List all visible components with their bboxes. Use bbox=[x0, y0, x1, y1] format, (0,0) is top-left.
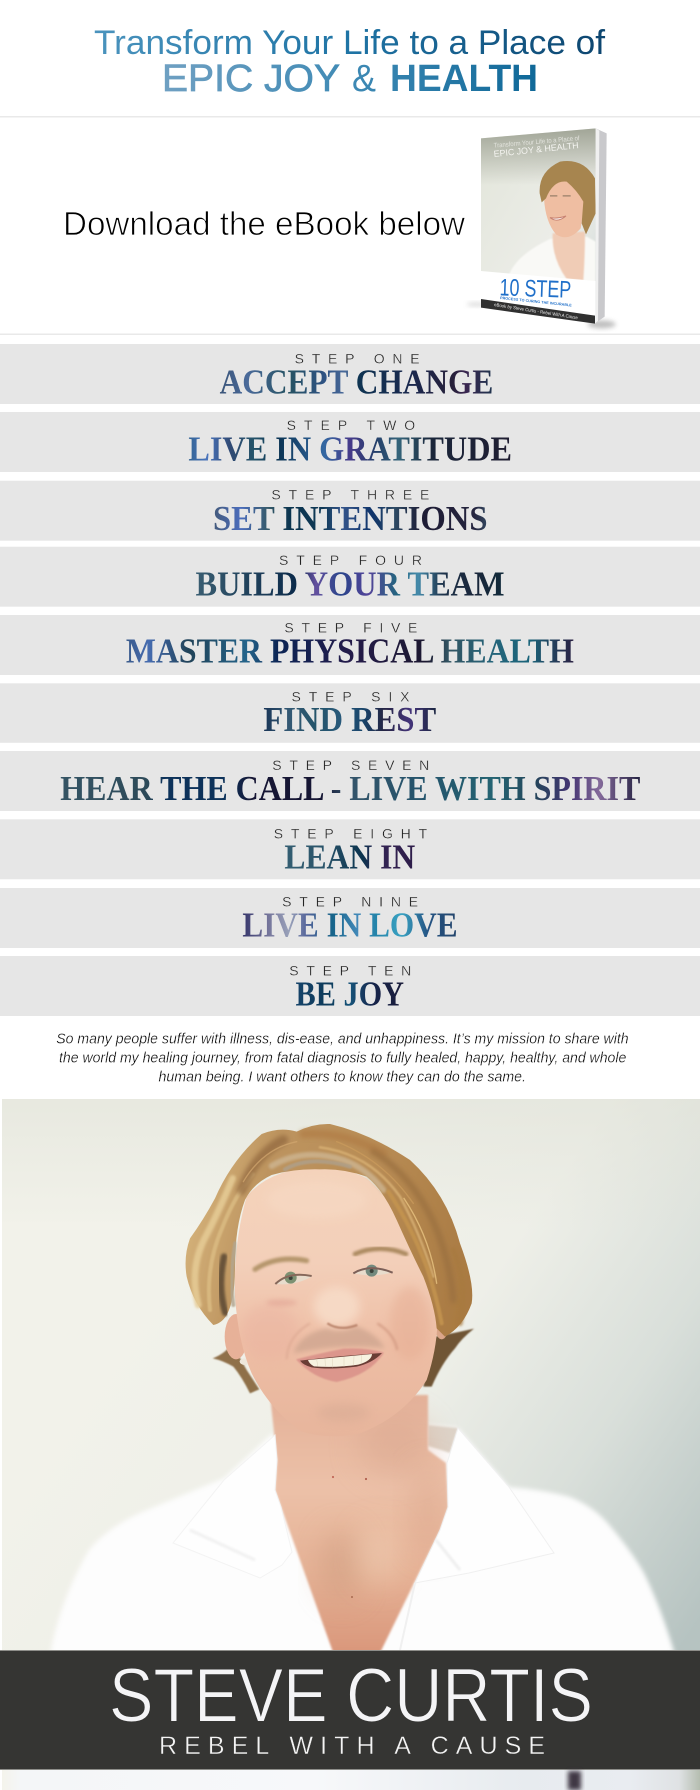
step seven: STEP SEVEN bbox=[272, 757, 429, 773]
mouth bbox=[296, 1348, 384, 1382]
step two: STEP TWO bbox=[287, 417, 415, 433]
ears bbox=[224, 1314, 244, 1360]
mission statement text block: human being. I want others to know they can do the same. bbox=[158, 1070, 526, 1086]
step three bbox=[0, 481, 700, 541]
eye right bbox=[353, 1265, 393, 1277]
eye left bbox=[275, 1272, 312, 1284]
collar flaps bbox=[173, 1428, 554, 1650]
panel: ten steps bbox=[0, 344, 700, 1016]
step one bbox=[0, 344, 700, 404]
head bbox=[186, 1124, 474, 1404]
shirt button bbox=[568, 1771, 581, 1790]
step ten: STEP TEN bbox=[289, 963, 411, 979]
step four: STEP FOUR bbox=[279, 552, 422, 568]
back hair bbox=[213, 1329, 474, 1393]
cover title: EPIC JOY & HEALTH bbox=[493, 140, 579, 159]
step seven bbox=[0, 751, 700, 811]
cover 10 step label: 10 STEP bbox=[499, 274, 572, 304]
step ten: BE JOY bbox=[296, 975, 404, 1014]
tagline: REBEL WITH A CAUSE bbox=[159, 1732, 545, 1760]
mission statement text block: So many people suffer with illness, dis-ease, and unhappiness. It’s my mission to share with bbox=[56, 1031, 629, 1047]
mission statement text block bbox=[56, 1031, 629, 1086]
mission statement text block: the world my healing journey, from fatal diagnosis to fully healed, happy, healthy, and whole bbox=[59, 1051, 626, 1067]
neck and chest bbox=[270, 1395, 448, 1655]
neck shading bbox=[322, 1415, 444, 1599]
title line two: EPIC JOY bbox=[162, 58, 340, 100]
step one: STEP ONE bbox=[295, 350, 420, 366]
step five bbox=[0, 615, 700, 675]
cover 10 step label: PROCESS TO CURING THE INCURABLE bbox=[500, 296, 572, 308]
name: STEVE CURTIS bbox=[109, 1654, 593, 1739]
step ten bbox=[0, 956, 700, 1016]
download heading: Download the eBook below bbox=[63, 205, 465, 242]
step eight: LEAN IN bbox=[284, 837, 415, 876]
collar inner back bbox=[428, 1425, 458, 1453]
step six: FIND REST bbox=[263, 700, 436, 739]
step two: LIVE IN GRATITUDE bbox=[188, 430, 512, 469]
step five: MASTER PHYSICAL HEALTH bbox=[126, 631, 574, 670]
cover author strip text: eBook by Steve Curtis - Rebel With A Cause bbox=[494, 302, 579, 320]
step nine bbox=[0, 888, 700, 948]
eyebrows bbox=[255, 1249, 406, 1269]
cover title: Transform Your Life to a Place of bbox=[494, 135, 580, 150]
facial shading bbox=[242, 1182, 430, 1422]
hair strands bbox=[195, 1134, 463, 1323]
portrait photo illustration bbox=[2, 1099, 700, 1659]
title bbox=[94, 24, 606, 100]
icon: ebook cover mockup bbox=[467, 128, 616, 328]
step eight: STEP EIGHT bbox=[274, 825, 428, 841]
step three: SET INTENTIONS bbox=[213, 499, 488, 538]
step nine: LIVE IN LOVE bbox=[242, 906, 458, 945]
step four bbox=[0, 547, 700, 607]
title line two: & bbox=[352, 58, 376, 100]
step four: BUILD YOUR TEAM bbox=[196, 565, 504, 604]
step three: STEP THREE bbox=[271, 486, 429, 502]
face bbox=[234, 1169, 437, 1404]
step seven: HEAR THE CALL - LIVE WITH SPIRIT bbox=[60, 769, 640, 808]
step five: STEP FIVE bbox=[284, 619, 417, 635]
step two bbox=[0, 412, 700, 472]
front hair bbox=[186, 1124, 472, 1337]
step six: STEP SIX bbox=[292, 689, 410, 705]
name band bbox=[0, 1650, 700, 1770]
shirt below band bbox=[2, 1770, 700, 1790]
step nine: STEP NINE bbox=[282, 894, 418, 910]
step eight bbox=[0, 819, 700, 879]
step six bbox=[0, 683, 700, 743]
title line two: HEALTH bbox=[390, 58, 538, 100]
shirt bbox=[50, 1425, 675, 1655]
step one: ACCEPT CHANGE bbox=[220, 362, 493, 401]
title line two bbox=[162, 58, 538, 100]
title line one: Transform Your Life to a Place of bbox=[94, 24, 606, 62]
